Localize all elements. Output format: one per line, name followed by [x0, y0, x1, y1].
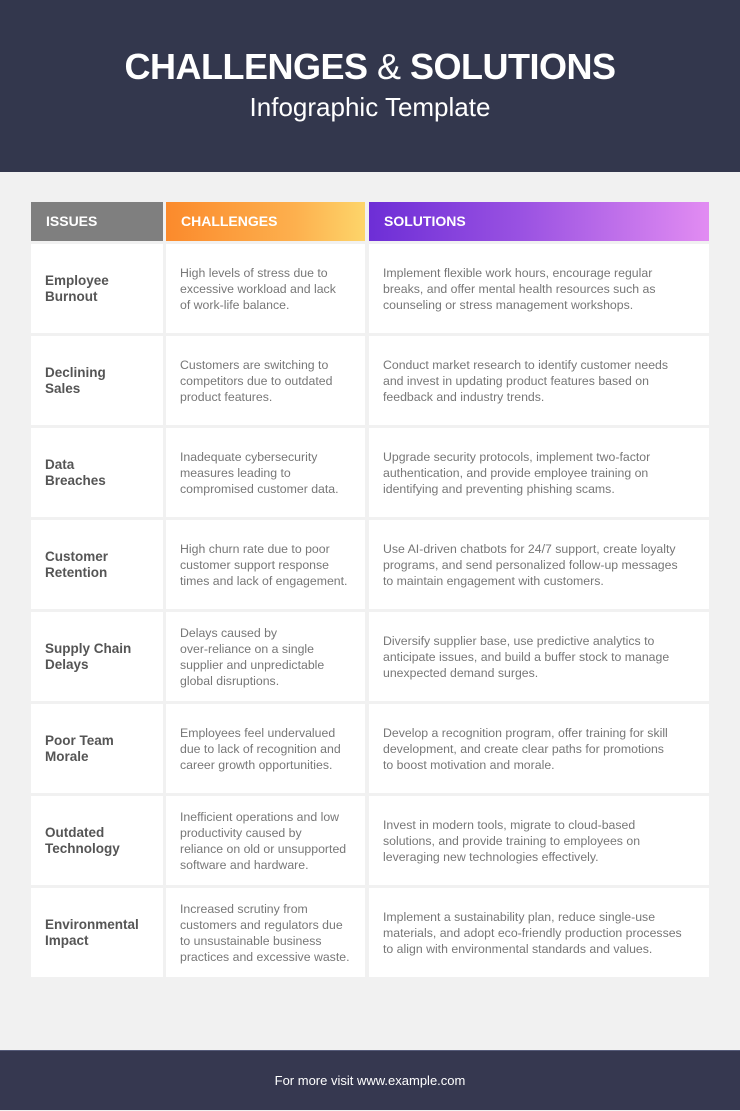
row 4: Customer Retention: programs, and send personalized follow-up messages	[383, 558, 678, 572]
row 2: Declining Sales: competitors due to outdated	[180, 374, 332, 388]
row 6: Poor Team Morale: to boost motivation and morale.	[383, 758, 555, 772]
row 2: Declining Sales: feedback and industry trends.	[383, 390, 544, 404]
row 1: Employee Burnout: of work-life balance.	[180, 298, 289, 312]
row 7: Outdated Technology: solutions, and provide training to employees on	[383, 834, 640, 848]
row 6: Poor Team Morale: Poor Team	[45, 732, 114, 748]
row 8: Environmental Impact: customers and regulators due	[180, 918, 343, 932]
row 7: Outdated Technology: Inefficient operations and low	[180, 810, 339, 824]
row 2: Declining Sales: Sales	[45, 380, 80, 396]
row 3: Data Breaches: authentication, and provide employee training on	[383, 466, 648, 480]
row 4: Customer Retention: Use AI-driven chatbots for 24/7 support, create loyalty	[383, 542, 676, 556]
row 6: Poor Team Morale: due to lack of recognition and	[180, 742, 341, 756]
row 3: Data Breaches: compromised customer data.	[180, 482, 339, 496]
row 3: Data Breaches	[31, 428, 709, 517]
row 6: Poor Team Morale: development, and create clear paths for promotions	[383, 742, 664, 756]
row 1: Employee Burnout: excessive workload and lack	[180, 282, 336, 296]
row 2: Declining Sales	[31, 336, 709, 425]
row 8: Environmental Impact: Impact	[45, 932, 89, 948]
row 2: Declining Sales: Customers are switching to	[180, 358, 328, 372]
row 7: Outdated Technology: reliance on old or unsupported	[180, 842, 346, 856]
row 5: Supply Chain Delays: Supply Chain	[45, 640, 131, 656]
row 7: Outdated Technology	[31, 796, 709, 885]
row 8: Environmental Impact: Implement a sustainability plan, reduce single-use	[383, 910, 655, 924]
row 8: Environmental Impact: to unsustainable business	[180, 934, 322, 948]
title: CHALLENGES & SOLUTIONS	[124, 46, 616, 87]
row 4: Customer Retention: to maintain engagement with customers.	[383, 574, 604, 588]
row 5: Supply Chain Delays: Delays caused by	[180, 626, 277, 640]
row 5: Supply Chain Delays	[31, 612, 709, 701]
row 8: Environmental Impact: Increased scrutiny from	[180, 902, 308, 916]
row 4: Customer Retention: Customer	[45, 548, 108, 564]
row 5: Supply Chain Delays: supplier and unpredictable	[180, 658, 324, 672]
row 3: Data Breaches: measures leading to	[180, 466, 291, 480]
row 4: Customer Retention: Retention	[45, 564, 107, 580]
row 1: Employee Burnout: breaks, and offer mental health resources such as	[383, 282, 656, 296]
table header: solutions: SOLUTIONS	[384, 213, 466, 229]
row 4: Customer Retention: customer support response	[180, 558, 329, 572]
row 8: Environmental Impact	[31, 888, 709, 977]
table header: solutions	[369, 202, 709, 241]
row 1: Employee Burnout: High levels of stress due to	[180, 266, 328, 280]
row 7: Outdated Technology: leveraging new technologies effectively.	[383, 850, 599, 864]
row 3: Data Breaches: Upgrade security protocols, implement two-factor	[383, 450, 650, 464]
row 5: Supply Chain Delays: global disruptions.	[180, 674, 279, 688]
row 6: Poor Team Morale: Employees feel undervalued	[180, 726, 335, 740]
row 8: Environmental Impact: Environmental	[45, 916, 139, 932]
row 7: Outdated Technology: Outdated	[45, 824, 104, 840]
row 5: Supply Chain Delays: over-reliance on a single	[180, 642, 314, 656]
row 3: Data Breaches: Data	[45, 456, 74, 472]
row 1: Employee Burnout: counseling or stress management workshops.	[383, 298, 633, 312]
row 8: Environmental Impact: materials, and adopt eco-friendly production processes	[383, 926, 682, 940]
row 8: Environmental Impact: to align with environmental standards and values.	[383, 942, 652, 956]
row 6: Poor Team Morale	[31, 704, 709, 793]
table header: issues: ISSUES	[46, 213, 97, 229]
row 5: Supply Chain Delays: anticipate issues, and build a buffer stock to manage	[383, 650, 669, 664]
row 6: Poor Team Morale: Morale	[45, 748, 89, 764]
row 3: Data Breaches: Breaches	[45, 472, 106, 488]
row 2: Declining Sales: and invest in updating product features based on	[383, 374, 649, 388]
row 6: Poor Team Morale: career growth opportunities.	[180, 758, 332, 772]
table header: challenges: CHALLENGES	[181, 213, 277, 229]
row 4: Customer Retention: High churn rate due to poor	[180, 542, 330, 556]
row 5: Supply Chain Delays: unexpected demand surges.	[383, 666, 538, 680]
row 7: Outdated Technology: Technology	[45, 840, 120, 856]
header banner	[0, 0, 740, 172]
row 1: Employee Burnout: Burnout	[45, 288, 97, 304]
row 1: Employee Burnout	[31, 244, 709, 333]
row 6: Poor Team Morale: Develop a recognition program, offer training for skill	[383, 726, 668, 740]
table header: issues	[31, 202, 163, 241]
footer	[0, 1050, 740, 1110]
row 5: Supply Chain Delays: Delays	[45, 656, 89, 672]
row 4: Customer Retention	[31, 520, 709, 609]
row 8: Environmental Impact: practices and excessive waste.	[180, 950, 350, 964]
row 2: Declining Sales: Conduct market research to identify customer needs	[383, 358, 668, 372]
subtitle: Infographic Template	[250, 92, 490, 122]
row 5: Supply Chain Delays: Diversify supplier base, use predictive analytics to	[383, 634, 654, 648]
row 1: Employee Burnout: Implement flexible work hours, encourage regular	[383, 266, 652, 280]
row 4: Customer Retention: times and lack of engagement.	[180, 574, 347, 588]
row 3: Data Breaches: Inadequate cybersecurity	[180, 450, 317, 464]
table header: challenges	[166, 202, 365, 241]
row 1: Employee Burnout: Employee	[45, 272, 109, 288]
footer: For more visit www.example.com	[275, 1073, 465, 1088]
row 7: Outdated Technology: productivity caused by	[180, 826, 302, 840]
row 7: Outdated Technology: Invest in modern tools, migrate to cloud-based	[383, 818, 635, 832]
row 2: Declining Sales: Declining	[45, 364, 106, 380]
row 3: Data Breaches: identifying and preventing phishing scams.	[383, 482, 615, 496]
row 7: Outdated Technology: software and hardware.	[180, 858, 309, 872]
row 2: Declining Sales: product features.	[180, 390, 272, 404]
